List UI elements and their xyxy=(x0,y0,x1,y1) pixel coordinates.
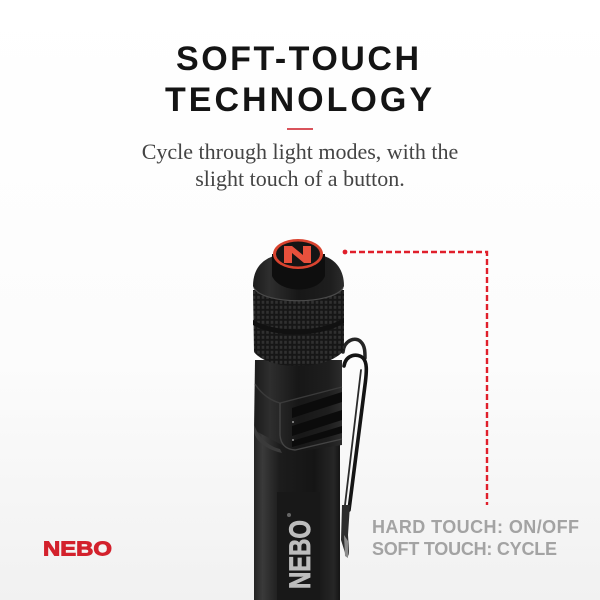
callout text: HARD TOUCH: ON/OFF xyxy=(372,517,579,537)
callout text: SOFT TOUCH: CYCLE xyxy=(372,539,557,559)
brand logo: NEBO: NEBO xyxy=(43,538,112,560)
button: N logo xyxy=(273,239,323,269)
head shoulder xyxy=(253,256,344,300)
barrel NEBO mark: NEBO xyxy=(284,520,317,589)
flashlight xyxy=(253,239,344,600)
knurled grip xyxy=(253,290,344,366)
barrel xyxy=(254,430,340,600)
subtitle xyxy=(142,139,458,191)
button stem xyxy=(272,254,325,290)
registered mark xyxy=(287,513,291,517)
callout text xyxy=(372,517,579,559)
shoulder rim highlight xyxy=(254,288,343,301)
title: SOFT-TOUCH xyxy=(176,40,419,78)
title xyxy=(165,40,432,119)
subtitle: Cycle through light modes, with the xyxy=(142,139,458,164)
title accent rule xyxy=(287,128,313,130)
title: TECHNOLOGY xyxy=(165,81,432,119)
callout leader line xyxy=(343,250,487,505)
barrel label xyxy=(277,492,320,600)
grip groove xyxy=(253,318,344,335)
clip collar xyxy=(254,360,342,453)
pocket clip xyxy=(341,339,366,558)
subtitle: slight touch of a button. xyxy=(195,166,405,191)
